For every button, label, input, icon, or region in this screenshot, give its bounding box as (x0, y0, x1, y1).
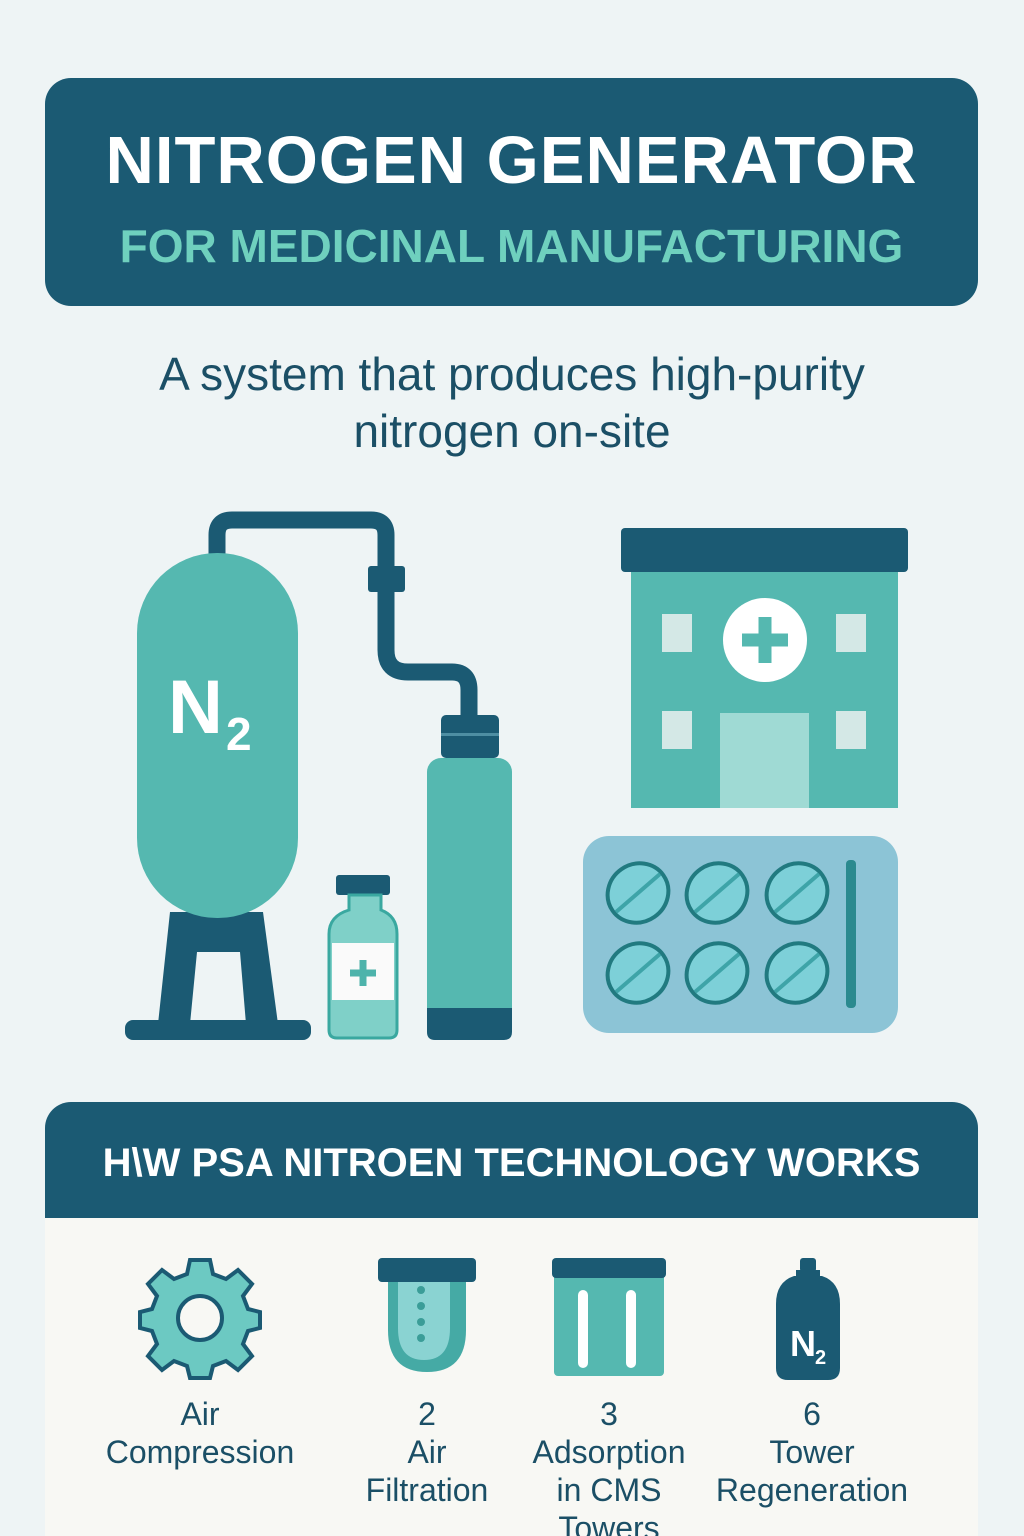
step 3 label (532, 1396, 685, 1536)
step 1 label: Air (180, 1396, 220, 1432)
step 2 label: Filtration (366, 1472, 488, 1508)
step 3 label: Adsorption (532, 1434, 685, 1470)
icon: N2 bottle: N (790, 1323, 816, 1364)
icon: filter (378, 1258, 476, 1372)
step labels (106, 1396, 908, 1536)
description text: nitrogen on-site (353, 405, 671, 457)
title panel (45, 78, 978, 306)
illustration (125, 512, 908, 1040)
step 4 label: Regeneration (716, 1472, 908, 1508)
icon: nitrogen tank (125, 553, 311, 1040)
icon: nitrogen tank: 2 (226, 708, 252, 760)
subtitle: FOR MEDICINAL MANUFACTURING (120, 220, 903, 272)
step 3 label: in CMS (557, 1472, 661, 1508)
section heading (45, 1102, 978, 1218)
icon: nitrogen tank: N (168, 665, 223, 750)
icon: pill blister (583, 836, 898, 1033)
step 2 label: Air (407, 1434, 447, 1470)
description text: A system that produces high-purity (159, 348, 865, 400)
icon: gear (140, 1260, 260, 1378)
step 4 label (716, 1396, 908, 1508)
icon: hospital building (621, 528, 908, 808)
step 4 label: 6 (803, 1396, 821, 1432)
title: NITROGEN GENERATOR (105, 123, 918, 198)
step 2 label (366, 1396, 488, 1508)
icon: gas cylinder (427, 715, 512, 1040)
section heading: H\W PSA NITROEN TECHNOLOGY WORKS (103, 1141, 920, 1185)
icon: pipe (217, 520, 469, 720)
icon: N2 bottle (776, 1258, 840, 1380)
icon: vial (329, 875, 397, 1038)
description text (159, 348, 865, 457)
icon: CMS towers (552, 1258, 666, 1376)
step 2 label: 2 (418, 1396, 436, 1432)
step 1 label (106, 1396, 294, 1470)
step 3 label: 3 (600, 1396, 618, 1432)
panel: how PSA works (45, 1102, 978, 1536)
step 4 label: Tower (769, 1434, 855, 1470)
icon: N2 bottle: 2 (815, 1347, 826, 1369)
step 1 label: Compression (106, 1434, 294, 1470)
